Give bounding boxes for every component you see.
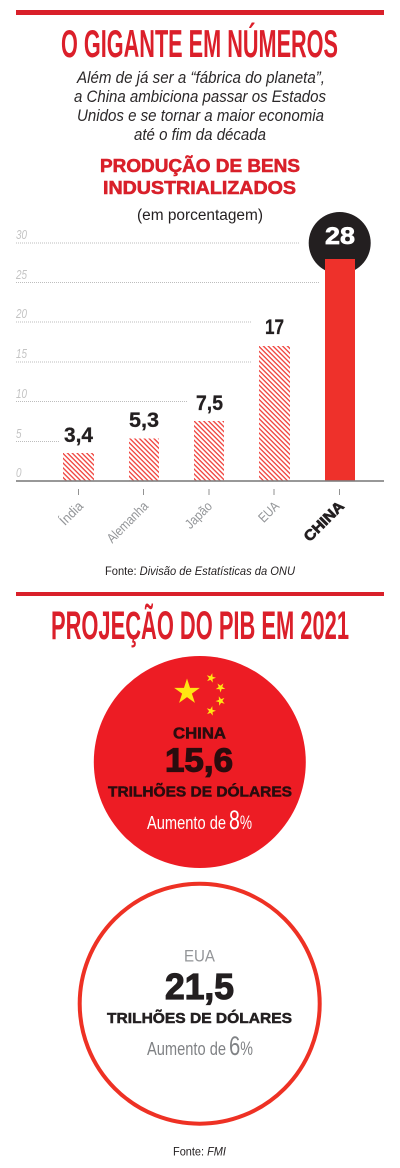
y axis labels: 25 xyxy=(15,268,27,282)
bar: China xyxy=(325,259,355,481)
y axis labels: 10 xyxy=(16,387,27,401)
increase: 8%: 8% xyxy=(229,805,252,835)
bar: EUA xyxy=(259,346,290,481)
y axis labels xyxy=(15,228,27,480)
y axis labels: 15 xyxy=(16,347,27,361)
value: Índia: 3,4 xyxy=(64,424,93,447)
intro text: até o fim da década xyxy=(134,126,266,144)
source: chart: Fonte: Divisão de Estatísticas da ONU xyxy=(105,566,296,578)
category label: Japão: Japão xyxy=(182,499,215,532)
category label: CHINA: CHINA xyxy=(301,498,348,545)
chart heading xyxy=(100,155,300,198)
unit: trilhões: TRILHÕES DE DÓLARES xyxy=(107,1009,292,1027)
y axis labels: 30 xyxy=(16,228,27,242)
increase: 8%: Aumento de xyxy=(147,813,226,833)
label: EUA: EUA xyxy=(184,948,215,966)
y axis labels: 20 xyxy=(15,307,27,321)
bar: Alemanha xyxy=(129,438,159,481)
value: China: 28 xyxy=(325,223,355,250)
intro text: a China ambiciona passar os Estados xyxy=(74,88,326,106)
y axis labels: 0 xyxy=(16,466,22,480)
increase: 8% xyxy=(147,805,252,835)
bar: Japão xyxy=(194,421,224,481)
y axis labels: 5 xyxy=(16,427,22,441)
category label: EUA: EUA xyxy=(255,499,282,525)
intro text xyxy=(74,69,326,144)
value: 21,5: 21,5 xyxy=(165,966,234,1007)
x axis line xyxy=(16,480,384,482)
chart unit note: (em porcentagem) xyxy=(137,207,263,224)
intro text: Unidos e se tornar a maior economia xyxy=(77,107,324,125)
panel: USA circle xyxy=(80,884,320,1124)
value: Alemanha: 5,3 xyxy=(129,409,159,432)
category label: Alemanha: Alemanha xyxy=(104,498,151,546)
bar chart xyxy=(15,212,384,546)
chart heading: PRODUÇÃO DE BENS xyxy=(100,155,300,176)
category label: Índia: Índia xyxy=(56,498,86,528)
label: China: CHINA xyxy=(173,726,226,742)
unit: trilhões: TRILHÕES DE DÓLARES xyxy=(108,782,292,800)
value badge: China xyxy=(309,212,371,274)
icon: flag stars xyxy=(174,672,227,716)
increase: 6%: 6% xyxy=(229,1031,253,1061)
bar: Índia xyxy=(63,453,94,481)
chart heading: INDUSTRIALIZADOS xyxy=(103,178,296,198)
source: GDP: Fonte: FMI xyxy=(173,1146,227,1158)
value: EUA: 17 xyxy=(265,316,284,339)
panel: China circle xyxy=(94,656,306,868)
increase: 6%: Aumento de xyxy=(147,1039,226,1059)
increase: 6% xyxy=(147,1031,253,1061)
second section rule xyxy=(16,592,384,596)
value: 15,6: 15,6 xyxy=(165,742,233,778)
top section rule xyxy=(16,10,384,15)
value: Japão: 7,5 xyxy=(196,392,223,415)
intro text: Além de já ser a “fábrica do planeta”, xyxy=(76,69,325,87)
